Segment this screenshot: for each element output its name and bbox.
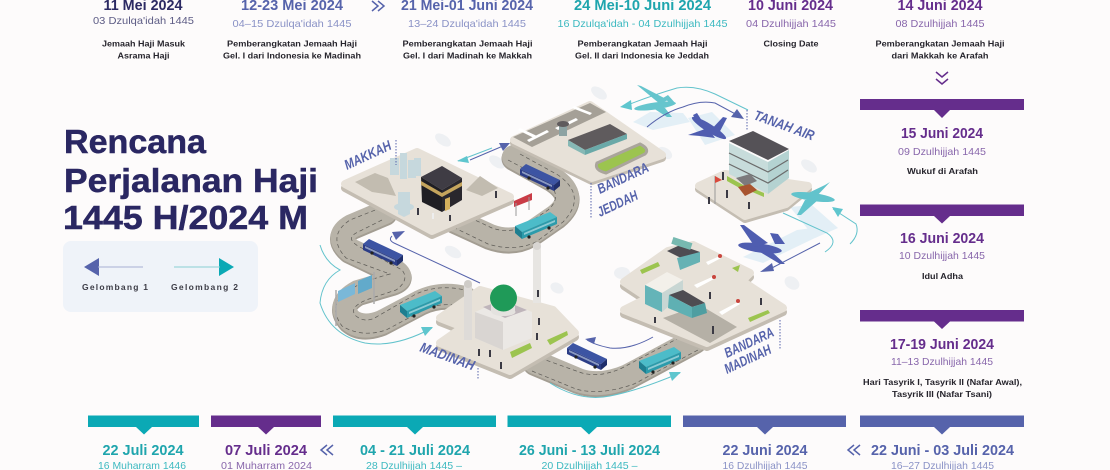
sign poles [396, 110, 780, 380]
step: 16 Juni 2024: Idul Adha [922, 271, 963, 281]
header: 21 Mei-01 Juni 2024 [401, 0, 534, 60]
header: 12-23 Mei 2024: 04–15 Dzulqa'idah 1445 [232, 18, 352, 30]
location labels: TANAH AIR [752, 107, 817, 144]
route arrows: Gelombang 1 (blue) [390, 102, 820, 348]
step: 22 Juli 2024: 22 Juli 2024 [102, 442, 184, 459]
pilgrims [417, 172, 762, 369]
platform: Makkah [345, 152, 510, 235]
header: 12-23 Mei 2024 [223, 0, 361, 60]
plane: blue right [738, 225, 785, 264]
illustration: journey map [320, 84, 857, 397]
step: 15 Juni 2024: Wukuf di Arafah [907, 166, 978, 176]
header: 11 Mei 2024: Asrama Haji [118, 50, 170, 60]
arrow: down chevrons right column [936, 72, 948, 84]
platform: Jeddah airport [513, 103, 662, 181]
header: 12-23 Mei 2024: Gel. I dari Indonesia ke Madinah [223, 50, 361, 60]
step: 17-19 Juni 2024: 17-19 Juni 2024 [890, 336, 995, 353]
legend card: Gelombang 2 [171, 282, 238, 292]
step: 22 Juli 2024 [88, 416, 199, 470]
header: 11 Mei 2024: 03 Dzulqa'idah 1445 [93, 15, 194, 27]
mountains: Makkah [355, 173, 498, 196]
icon: Kaaba [421, 166, 462, 212]
gates and signs [336, 193, 532, 326]
header: 21 Mei-01 Juni 2024: 13–24 Dzulqa'idah 1445 [408, 18, 526, 30]
road: Jeddah to Makkah [455, 154, 574, 248]
header: 11 Mei 2024 [93, 0, 194, 60]
header: 24 Mei-10 Juni 2024: Pemberangkatan Jemaah Haji [578, 38, 708, 48]
header: 21 Mei-01 Juni 2024: Gel. I dari Madinah ke Makkah [403, 50, 532, 60]
header: 10 Juni 2024: 04 Dzulhijjah 1445 [746, 18, 836, 30]
step: 04 - 21 Juli 2024: 04 - 21 Juli 2024 [360, 442, 471, 459]
header: 24 Mei-10 Juni 2024 [558, 0, 728, 60]
step: 17-19 Juni 2024: 11–13 Dzulhijjah 1445 [891, 356, 993, 368]
arrow: back chevrons bottom right [848, 445, 860, 455]
header: 12-23 Mei 2024: Pemberangkatan Jemaah Haji [227, 38, 357, 48]
arrow: forward chevrons top [372, 1, 384, 11]
location labels: JEDDAH [595, 187, 641, 220]
header: 10 Juni 2024: Closing Date [764, 38, 819, 48]
step: 17-19 Juni 2024: Hari Tasyrik I, Tasyrik II (Nafar Awal), [863, 377, 1022, 387]
header: 14 Juni 2024: Pemberangkatan Jemaah Haji [876, 38, 1004, 48]
location labels: BANDARA [595, 159, 651, 197]
step: 26 Juni - 13 Juli 2024 [508, 416, 671, 470]
platform: Bandara Madinah [624, 245, 783, 347]
title [63, 123, 318, 236]
planes [634, 85, 835, 264]
step: 15 Juni 2024: 09 Dzulhijjah 1445 [898, 146, 986, 158]
mosque: Madinah [464, 242, 568, 358]
title: Perjalanan Haji [64, 162, 318, 199]
platform: Madinah [440, 290, 575, 375]
step: 22 Juni - 03 Juli 2024 [860, 416, 1024, 470]
road: Makkah to Madinah [336, 205, 465, 333]
plane: teal top [634, 85, 676, 117]
arrow: back chevrons bottom left [321, 445, 333, 455]
header: 24 Mei-10 Juni 2024: 16 Dzulqa'idah - 04 Dzulhijjah 1445 [558, 18, 728, 30]
step: 22 Juni - 03 Juli 2024: 22 Juni - 03 Juli 2024 [871, 442, 1015, 459]
platform: Tanah Air [699, 174, 808, 219]
buses [363, 164, 681, 374]
header: 11 Mei 2024: Jemaah Haji Masuk [102, 38, 185, 48]
step: 22 Juni 2024: 22 Juni 2024 [722, 442, 808, 459]
plane: blue top [688, 113, 728, 142]
step: 16 Juni 2024: 10 Dzulhijjah 1445 [899, 250, 985, 262]
step: 22 Juni 2024 [683, 416, 846, 470]
header: 14 Juni 2024: dari Makkah ke Arafah [892, 50, 988, 60]
route trails [633, 112, 838, 263]
airport buildings: Madinah [640, 237, 770, 322]
location labels [342, 107, 817, 377]
header: 14 Juni 2024: 08 Dzulhijjah 1445 [896, 18, 985, 30]
towers: Makkah [390, 153, 421, 217]
step: 16 Juni 2024: 16 Juni 2024 [900, 230, 985, 247]
title: Rencana [64, 123, 207, 160]
step: 16 Juni 2024 [860, 204, 1024, 281]
step: 07 Juli 2024 [211, 416, 321, 470]
step: 15 Juni 2024: 15 Juni 2024 [901, 125, 984, 142]
step: 26 Juni - 13 Juli 2024: 26 Juni - 13 Juli 2024 [519, 442, 661, 459]
header: 24 Mei-10 Juni 2024: Gel. II dari Indonesia ke Jeddah [575, 50, 709, 60]
step: 07 Juli 2024: 07 Juli 2024 [225, 442, 308, 459]
location labels: MAKKAH [342, 137, 394, 173]
step: 15 Juni 2024 [860, 99, 1024, 176]
building: Tanah Air [715, 131, 789, 204]
location labels: MADINAH [722, 341, 774, 377]
step: 17-19 Juni 2024 [860, 310, 1024, 399]
header: 10 Juni 2024 [746, 0, 836, 48]
clouds [433, 84, 819, 296]
plane: teal right [791, 182, 835, 215]
header: 14 Juni 2024 [876, 0, 1004, 60]
parked planes: Madinah [694, 254, 740, 315]
road: Madinah to Bandara Madinah [532, 332, 698, 392]
route arrows: Gelombang 2 (teal) [320, 87, 857, 397]
step: 04 - 21 Juli 2024 [333, 416, 496, 470]
location labels: BANDARA [722, 324, 776, 361]
legend card: Gelombang 1 [82, 282, 148, 292]
legend card [63, 241, 258, 312]
airport terminal: Jeddah [518, 106, 647, 173]
step: 17-19 Juni 2024: Tasyrik III (Nafar Tsani) [892, 389, 992, 399]
header: 21 Mei-01 Juni 2024: Pemberangkatan Jemaah Haji [402, 38, 532, 48]
location labels: MADINAH [418, 339, 478, 374]
title: 1445 H/2024 M [63, 199, 308, 236]
